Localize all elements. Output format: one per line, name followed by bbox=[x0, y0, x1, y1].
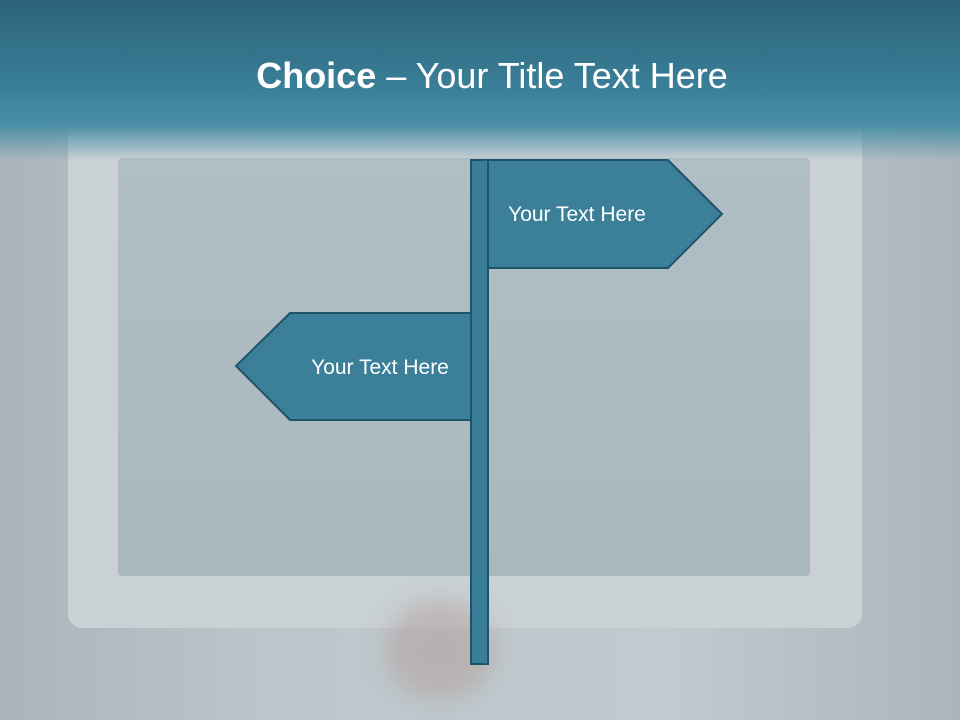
tablet background bbox=[68, 120, 862, 628]
header banner bbox=[0, 0, 960, 160]
sign left bbox=[236, 313, 471, 420]
title: Choice – Your Title Text Here bbox=[256, 55, 728, 96]
sign left: Your Text Here bbox=[311, 356, 449, 379]
sign right: Your Text Here bbox=[508, 203, 646, 226]
hand shadow bbox=[385, 600, 495, 700]
sign right bbox=[488, 160, 722, 268]
pole bbox=[471, 160, 488, 664]
tablet screen bbox=[118, 158, 810, 576]
